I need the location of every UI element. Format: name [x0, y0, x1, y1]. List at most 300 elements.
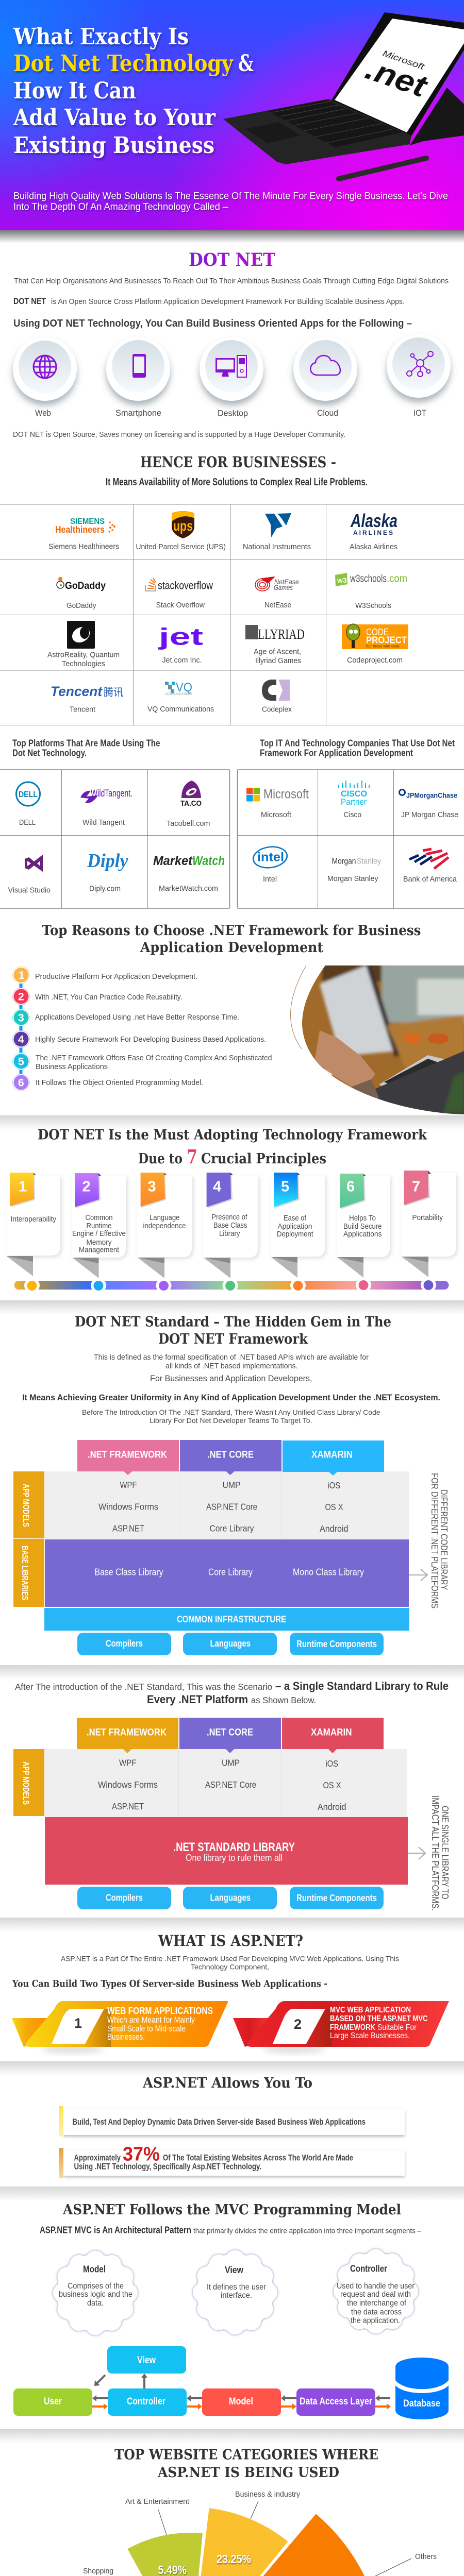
card 6 [337, 1174, 390, 1278]
badge: controller: the data across [351, 2308, 402, 2316]
card 2: Management [79, 1246, 120, 1254]
label: app models [13, 1749, 44, 1816]
arrow [408, 1847, 425, 1859]
subheading: It Means Availability of More Solutions to Complex Real Life Problems. [106, 477, 368, 488]
card 6: Build Secure [343, 1222, 382, 1231]
item 4 [12, 1030, 266, 1048]
buttons: Runtime Components [296, 1893, 377, 1903]
box: controller: Controller [127, 2396, 165, 2407]
subheading: top platforms: Dot Net Technology. [12, 748, 87, 758]
panel: MVC web application: BASED ON THE ASP.NET MVC [330, 2014, 428, 2023]
logo: Tencent: 腾讯 [104, 687, 123, 699]
logo: Illyriad [245, 625, 305, 642]
app model items: ASP.NET [112, 1801, 144, 1811]
card 5: 5 [281, 1179, 289, 1195]
logo: Siemens Healthineers: SIEMENS [70, 517, 105, 526]
text block: standard definition: For Businesses and Application Developers, [150, 1374, 312, 1383]
app model items: ASP.NET [112, 1523, 144, 1533]
title: Add Value to Your [13, 105, 216, 131]
panel: web form applications: Small Scale to Mid-scale [107, 2024, 186, 2033]
label: VQ Communications [147, 705, 214, 714]
badge: model: Model [83, 2264, 106, 2274]
card 1: Interoperability [11, 1215, 56, 1224]
panel: IT companies table [237, 770, 464, 908]
item 5 [12, 1053, 272, 1071]
card 2: Common [86, 1213, 112, 1222]
text block: standard definition: Library For Dot Net Developer Teams To Target To. [150, 1416, 312, 1425]
label: Tacobell.com [167, 819, 210, 828]
panel: MVC web application: 2 [294, 2016, 302, 2032]
heading: must adopting: Crucial Principles [201, 1151, 326, 1167]
app model items: WPF [120, 1480, 137, 1490]
text block: MVC intro: ASP.NET MVC is An Architectural Pattern [40, 2225, 191, 2235]
text block: standard definition [22, 1353, 440, 1425]
badge: view: It defines the user [207, 2283, 266, 2292]
logo: W3Schools: w3 [337, 576, 347, 584]
icon: web [13, 337, 77, 401]
item 4: Highly Secure Framework For Developing Business Based Applications. [35, 1035, 266, 1044]
panel: MVC web application [233, 2001, 449, 2054]
logo: WildTangent [80, 788, 132, 803]
header: .NET Core [179, 1718, 281, 1753]
text block: MVC intro [40, 2225, 421, 2235]
card: 37 percent stat: Of The Total Existing Websites Across The World Are Made [163, 2153, 353, 2163]
heading: top reasons: Application Development [140, 940, 323, 956]
label: National Instruments [243, 543, 311, 551]
standard library block [45, 1817, 408, 1885]
header: .NET Framework: .NET FRAMEWORK [87, 1727, 167, 1738]
sector: others: Others [415, 2552, 437, 2561]
logo: MarketWatch: Market [153, 854, 193, 868]
subheading: top IT companies: Framework For Application Development [260, 748, 413, 758]
app model items: iOS [326, 1758, 338, 1769]
panel: web form applications: Which are Meant for Mainly [107, 2015, 195, 2025]
box: view: View [137, 2355, 156, 2366]
hero subtitle: Into The Depth Of An Amazing Technology Called – [13, 201, 228, 212]
card 5 [271, 1173, 325, 1278]
vertical caption: ONE SINGLE LIBRARY TO [440, 1806, 450, 1899]
logo: GoDaddy: GoDaddy [65, 581, 106, 591]
item 2 [12, 988, 183, 1005]
buttons [77, 1633, 384, 1655]
logo: Microsoft [246, 787, 309, 802]
app model items: ASP.NET Core [205, 1780, 256, 1790]
panel: web form applications: 1 [74, 2015, 82, 2031]
label: Stack Overflow [156, 601, 205, 609]
card 3: Language [150, 1213, 179, 1222]
card 7: Portability [412, 1213, 443, 1222]
chart: MVC flow diagram [13, 2346, 449, 2419]
box: view [107, 2346, 186, 2374]
label: base libraries: BASE LIBRARIES [20, 1546, 30, 1600]
standard library block: .NET STANDARD LIBRARY [173, 1840, 295, 1854]
logo: Intel: intel [257, 850, 284, 865]
sector: business and industry: Business & industry [235, 2490, 300, 2499]
label: app models [13, 1471, 44, 1538]
app model items: UMP [222, 1758, 240, 1768]
icon: IoT [387, 334, 451, 398]
logo: W3Schools: .com [387, 573, 407, 584]
logo: Code Project: For those who code [366, 645, 400, 648]
label: Alaska Airlines [350, 543, 397, 551]
card 4: Base Class [213, 1221, 247, 1230]
text block: ASP.NET definition: ASP.NET is a Part Of The Entire .NET Framework Used For Developing MVC Web Applications. Using This [61, 1955, 399, 1963]
heading: MVC model: ASP.NET Follows the MVC Programming Model [62, 2202, 401, 2218]
logo: Code Project: PROJECT [366, 635, 407, 645]
heading: hidden gem: DOT NET Framework [158, 1331, 308, 1347]
card 2 [72, 1173, 126, 1278]
badge: view: View [225, 2265, 244, 2275]
label: IOT [413, 408, 426, 418]
box: user [13, 2388, 92, 2416]
logo: W3Schools [335, 573, 407, 586]
panel: app type icons [13, 334, 451, 418]
icon: laptop with .NET screen [223, 12, 464, 179]
logo: UPS [172, 511, 194, 538]
heading: website categories: ASP.NET IS BEING USED [157, 2465, 339, 2481]
panel: platforms table [0, 770, 230, 908]
base libraries block: Base Class Library [95, 1567, 163, 1578]
vertical caption: DIFFERENT CODE LIBRARY [439, 1489, 449, 1590]
standard library block: One library to rule them all [186, 1853, 283, 1863]
buttons: Languages [210, 1893, 251, 1903]
logo: Alaska Airlines: AIRLINES [353, 529, 393, 536]
header: .NET Core: .NET CORE [207, 1727, 253, 1738]
icon: smartphone [106, 337, 170, 401]
panel: MVC web application: Large Scale Businesses. [330, 2031, 410, 2040]
card 1 [7, 1173, 60, 1276]
heading: hidden gem [75, 1314, 391, 1347]
vertical caption: IMPACT ALL THE PLATFORMS. [430, 1795, 440, 1911]
app model items: UMP [223, 1480, 240, 1490]
heading: top reasons: Top Reasons to Choose .NET Framework for Business [42, 923, 421, 939]
label [254, 647, 301, 665]
buttons: Languages [210, 1638, 251, 1649]
label: Intel [263, 875, 277, 884]
label: Age of Ascent, [254, 647, 301, 656]
title: Dot Net Technology [13, 50, 234, 77]
app model items: Windows Forms [98, 1780, 158, 1790]
panel: hero [0, 0, 464, 243]
app model items: OS X [325, 1502, 343, 1512]
buttons: Compilers [106, 1638, 143, 1649]
item 6: It Follows The Object Oriented Programming Model. [36, 1078, 203, 1087]
label: MarketWatch.com [159, 884, 218, 893]
logo: Siemens Healthineers: Healthineers [55, 524, 105, 535]
app model items [98, 1480, 349, 1534]
sector: art and entertainment: Art & Entertainment [125, 2497, 190, 2506]
label: app models: APP MODELS [21, 1484, 31, 1527]
logo: JP Morgan Chase: JPMorganChase [406, 791, 457, 800]
card 6: 6 [346, 1179, 355, 1195]
title: Existing Business [13, 132, 214, 159]
heading: must adopting: Due to [138, 1151, 183, 1167]
logo: VQ: VQ [176, 681, 192, 694]
label: AstroReality, Quantum [47, 650, 120, 659]
app model items: ASP.NET Core [206, 1501, 257, 1512]
title [13, 24, 254, 159]
label: base libraries [13, 1539, 44, 1607]
label: Siemens Healthineers [48, 542, 119, 551]
base libraries block: Core Library [208, 1567, 253, 1578]
heading: must adopting: DOT NET Is the Must Adopting Technology Framework [38, 1127, 427, 1143]
panel: web form applications [12, 2001, 228, 2054]
logo: W3Schools: w3schools [350, 573, 387, 584]
header: .NET Framework [77, 1718, 178, 1753]
logo: Intel [252, 845, 288, 870]
card 2: Memory [87, 1238, 112, 1247]
card 4: Presence of [211, 1213, 247, 1222]
item 3: 3 [18, 1012, 24, 1024]
logo: VQ: COMMUNICATIONS [165, 693, 192, 696]
app model items [98, 1758, 346, 1812]
label: NetEase [264, 601, 291, 609]
icon: desktop [200, 337, 263, 401]
sector: art and entertainment [125, 2497, 203, 2576]
text block: intro: DOT NET [13, 296, 46, 306]
label: Tencent [70, 705, 96, 714]
label: Desktop [218, 408, 248, 418]
logo: Morgan Stanley: Stanley [357, 857, 381, 866]
card 4 [203, 1173, 258, 1278]
text block: intro: Using DOT NET Technology, You Can Build Business Oriented Apps for the Following – [13, 318, 412, 329]
text block: standard definition: It Means Achieving Greater Uniformity in Any Kind of Application Development Under the .NET Ecosystem. [22, 1393, 440, 1402]
logo: Bank of America [409, 849, 449, 869]
label: Microsoft [261, 810, 292, 819]
panel: MVC web application: MVC WEB APPLICATION [330, 2006, 411, 2014]
card 2: Engine / Effective [72, 1229, 126, 1238]
badge: model: business logic and the [59, 2290, 132, 2299]
card 3 [137, 1173, 192, 1278]
text block: ASP.NET definition [61, 1955, 399, 1971]
box: data access layer [296, 2388, 375, 2416]
text block: after .NET Standard: as Shown Below. [251, 1695, 316, 1705]
label: Diply.com [89, 884, 121, 893]
header: Xamarin: XAMARIN [311, 1450, 353, 1460]
heading: ASP.NET allows you to: ASP.NET Allows You To [142, 2075, 312, 2091]
text block: after .NET Standard: Every .NET Platform [147, 1693, 248, 1706]
label: Wild Tangent [82, 818, 125, 827]
heading: hidden gem: DOT NET Standard – The Hidden Gem in The [75, 1314, 391, 1330]
heading: hence for businesses: HENCE FOR BUSINESSES - [140, 453, 336, 471]
label: Illyriad Games [255, 656, 301, 665]
card 5: Deployment [277, 1230, 313, 1239]
title: & [238, 50, 254, 77]
label: Codeplex [262, 705, 292, 714]
buttons: Compilers [106, 1893, 143, 1903]
subheading: top platforms [12, 738, 160, 758]
badge: controller: Used to handle the user [337, 2282, 415, 2291]
logo: NetEase Games: NetEase [274, 578, 299, 586]
arrows [92, 2374, 391, 2410]
card 1: 1 [19, 1179, 27, 1195]
label: Visual Studio [8, 886, 51, 894]
subheading: top IT companies [260, 738, 455, 758]
title: How It Can [13, 78, 136, 104]
logo: MarketWatch: Watch [192, 854, 225, 868]
text block: intro: is An Open Source Cross Platform Application Development Framework For Building Scalable Business Apps. [51, 297, 405, 306]
text block: MVC intro: that primarily divides the entire application into three important segments – [193, 2227, 421, 2235]
label: Cisco [343, 810, 361, 819]
label: DELL [19, 818, 36, 827]
logo: Dell: DELL [19, 790, 38, 799]
logo: MarketWatch [153, 854, 225, 868]
label [47, 650, 120, 668]
text block: intro: That Can Help Organisations And Businesses To Reach Out To Their Ambitious Business Goals Through Cutting Edge Digital Solutions [14, 277, 449, 285]
label: app models: APP MODELS [21, 1761, 31, 1805]
card 7 [401, 1171, 456, 1277]
badge: controller: Controller [350, 2264, 387, 2274]
logo: Microsoft: Microsoft [263, 787, 309, 802]
logo: Cisco: Partner [341, 797, 367, 807]
sector: shopping: Shopping [83, 2567, 113, 2575]
label: Bank of America [403, 875, 457, 884]
logo: Morgan Stanley: Morgan [332, 857, 356, 866]
logo: Taco Bell [180, 781, 202, 808]
logo: Diply: Diply [87, 850, 128, 872]
heading: website categories [114, 2447, 378, 2481]
vertical caption: FOR DIFFERENT .NET PLATEFORMS [429, 1473, 440, 1608]
card 4: Library [219, 1229, 240, 1238]
item 3 [12, 1009, 239, 1026]
app model items: iOS [328, 1480, 340, 1490]
card 2: 2 [82, 1179, 91, 1195]
item 2: With .NET, You Can Practice Code Reusability. [35, 993, 183, 1002]
header: Xamarin: XAMARIN [311, 1727, 352, 1738]
timeline [14, 1278, 449, 1293]
logo: Cisco: CISCO [341, 789, 367, 799]
logo: National Instruments [265, 513, 291, 537]
badge: model: Comprises of the [68, 2282, 124, 2291]
label: W3Schools [355, 601, 391, 610]
card: 37 percent stat: Approximately [74, 2153, 121, 2163]
icon: laptop with .NET screen: Microsoft [382, 48, 426, 72]
common infrastructure [44, 1608, 409, 1631]
panel: web form applications: WEB FORM APPLICATIONS [107, 2006, 213, 2016]
label: Technologies [62, 659, 105, 668]
label: Codeproject.com [347, 656, 403, 665]
logo: AstroReality [67, 621, 95, 649]
card: 37 percent stat [59, 2143, 405, 2178]
card 6: Helps To [349, 1214, 376, 1223]
badge: controller: request and deal with [340, 2290, 411, 2299]
chart: website categories radial [23, 2490, 437, 2576]
box: user: User [44, 2396, 62, 2407]
text block: after .NET Standard: After The introduction of the .NET Standard, This was the Scenario [15, 1682, 272, 1692]
label: JP Morgan Chase [401, 810, 458, 819]
text block: standard definition: This is defined as the formal specification of .NET based APIs which are available for [94, 1353, 369, 1362]
logo: NetEase Games [255, 577, 299, 591]
heading: top reasons [42, 923, 421, 956]
badge: view [193, 2250, 277, 2335]
logo: Stack Overflow [145, 578, 213, 591]
logo: Taco Bell: TA.CO [180, 799, 202, 808]
logo: Illyriad: LLYRIAD [258, 626, 305, 642]
label: Jet.com Inc. [162, 656, 202, 665]
label: Smartphone [115, 408, 161, 418]
chart: architecture before .NET Standard [13, 1440, 449, 1655]
icon: cloud [293, 337, 357, 401]
subheading: two types: You Can Build Two Types Of Server-side Business Web Applications - [12, 1978, 327, 1990]
card 7: 7 [412, 1179, 420, 1195]
logo: Codeplex [262, 680, 290, 701]
icon: laptop with .NET screen: .net [361, 51, 433, 104]
item 5: Business Applications [36, 1062, 108, 1071]
item 3: Applications Developed Using .net Have Better Response Time. [35, 1013, 239, 1022]
label: GoDaddy [67, 601, 96, 610]
badge: view: interface. [221, 2291, 252, 2300]
app model items: Core Library [209, 1523, 254, 1533]
arrow [409, 1569, 427, 1581]
item 2: 2 [18, 991, 24, 1003]
badge: controller [334, 2249, 418, 2334]
label: United Parcel Service (UPS) [136, 543, 226, 551]
logo: NetEase Games: Games [274, 583, 293, 591]
app model items: OS X [323, 1780, 341, 1790]
header: Xamarin [282, 1718, 384, 1753]
box: controller [108, 2388, 187, 2416]
panel: reasons list [12, 967, 272, 1091]
app model items: Android [320, 1523, 349, 1534]
label: Cloud [317, 408, 338, 418]
card 3: independence [143, 1222, 186, 1230]
card 2: Runtime [87, 1222, 111, 1230]
label: Morgan Stanley [327, 874, 378, 883]
logo: Stack Overflow: stackoverflow [158, 580, 213, 591]
item 5: 5 [18, 1056, 24, 1067]
logo: Siemens Healthineers [55, 517, 115, 535]
base libraries block: Mono Class Library [293, 1567, 364, 1578]
logo: Cisco [339, 781, 369, 807]
card: build test deploy: Build, Test And Deploy Dynamic Data Driven Server-side Based Business Web Applications [72, 2117, 366, 2127]
panel: MVC web application: FRAMEWORK [330, 2023, 375, 2032]
logo: UPS: ups [173, 518, 193, 534]
common infrastructure: COMMON INFRASTRUCTURE [177, 1614, 286, 1624]
heading: must adopting: 7 [187, 1145, 197, 1168]
text block: after .NET Standard [15, 1680, 449, 1706]
base libraries block [45, 1539, 409, 1607]
logo: WildTangent: WildTangent. [91, 788, 132, 799]
card: 37 percent stat: 37% [123, 2143, 160, 2165]
label: Web [35, 408, 51, 418]
text block: standard definition: Before The Introduction Of The .NET Standard, There Wasn't Any Unified Class Library/ Code [82, 1408, 380, 1416]
subheading: top platforms: Top Platforms That Are Made Using The [12, 738, 160, 748]
logo: Alaska Airlines [350, 510, 397, 536]
box: model [202, 2388, 281, 2416]
logo: GoDaddy [57, 577, 106, 591]
item 4: 4 [18, 1033, 24, 1046]
heading: DOT NET: DOT NET [189, 249, 275, 270]
item 6: 6 [18, 1077, 24, 1089]
title: What Exactly Is [13, 24, 189, 50]
logo: jet: jet [158, 623, 203, 650]
item 5: The .NET Framework Offers Ease Of Creating Complex And Sophisticated [36, 1054, 272, 1062]
header: .NET Core [180, 1440, 281, 1475]
box: model: Model [229, 2396, 253, 2407]
buttons [77, 1887, 384, 1909]
card 5: Ease of [284, 1214, 307, 1223]
panel: web form applications: Businesses. [107, 2032, 145, 2042]
badge: controller: the interchange of [347, 2299, 407, 2308]
hero subtitle [13, 191, 448, 212]
logo: Morgan Stanley [332, 857, 381, 866]
chart: architecture after .NET Standard [13, 1718, 450, 1911]
text block: ASP.NET definition: Technology Component, [191, 1963, 269, 1971]
item 6 [12, 1074, 203, 1091]
logo: Dell [16, 782, 40, 806]
logo: JP Morgan Chase [399, 789, 457, 800]
heading: website categories: TOP WEBSITE CATEGORIES WHERE [114, 2447, 378, 2463]
